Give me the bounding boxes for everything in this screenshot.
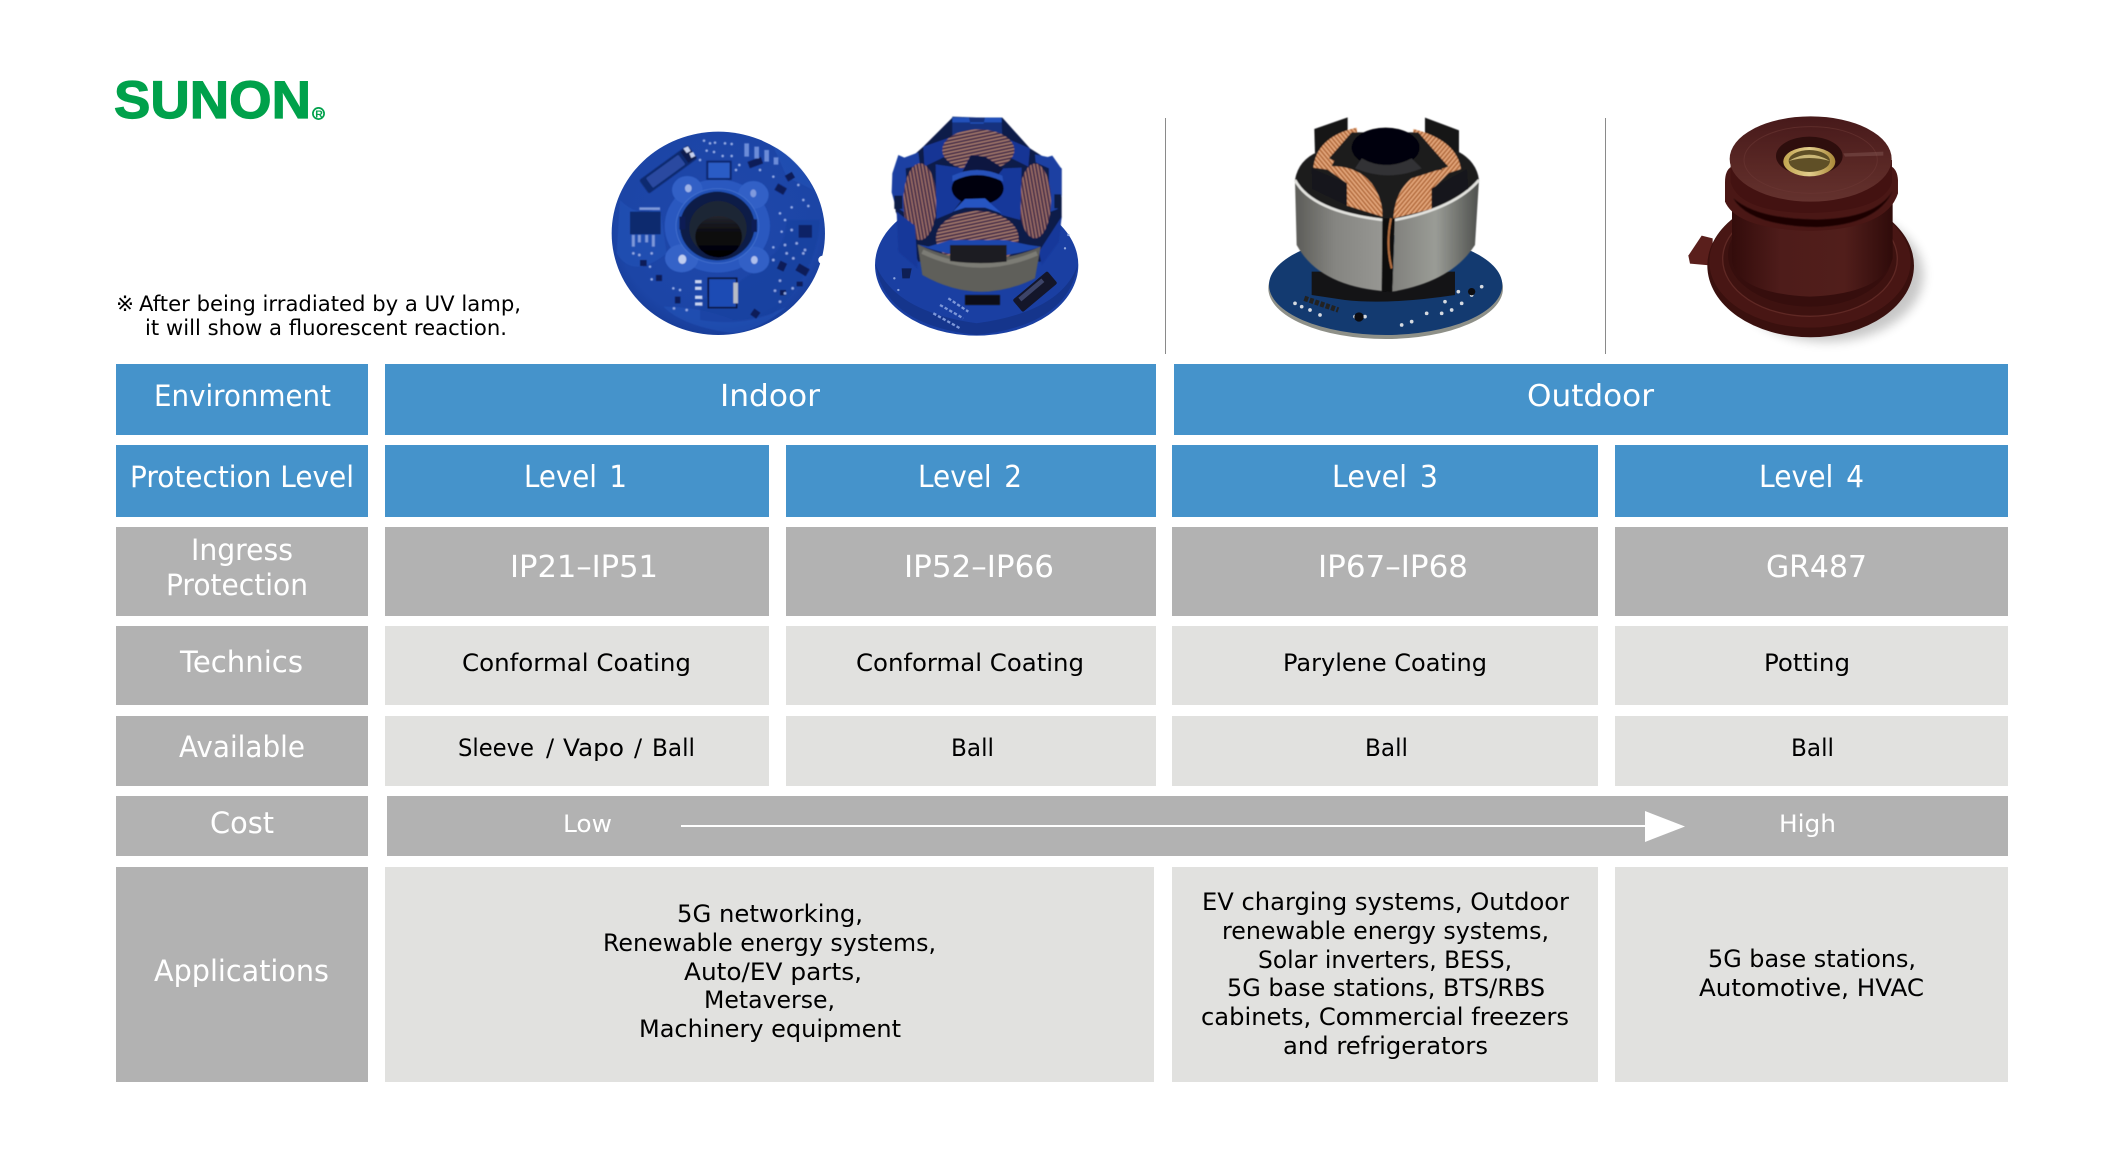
divider line (1165, 118, 1166, 354)
Ball level 4: Ball (1791, 734, 1834, 762)
row label: Environment (116, 364, 368, 435)
right coil (1019, 164, 1051, 238)
Ball level 2 (786, 716, 1156, 786)
lower left and right housing (897, 212, 918, 268)
Conformal Coating level 2 (786, 626, 1156, 705)
outdoor level 3 applications: cabinets, Commercial freezers (1201, 1003, 1569, 1031)
GR487 (1615, 527, 2008, 616)
Ball level 3: Ball (1365, 734, 1408, 762)
body (1732, 198, 1893, 297)
header: Outdoor: Outdoor (1527, 379, 1655, 414)
back tabs (1314, 117, 1348, 153)
note: UV lamp fluorescent reaction: After being irradiated by a UV lamp, (139, 292, 521, 317)
logo: SUNON: SUNON (114, 71, 311, 130)
indoor applications: 5G networking, (677, 900, 863, 928)
row: available (116, 716, 2008, 786)
top cylinder (1731, 160, 1892, 213)
Conformal Coating level 2: Conformal Coating (856, 649, 1084, 677)
flange (1707, 194, 1914, 337)
outdoor level 3 applications: renewable energy systems, (1222, 917, 1549, 945)
front tabs (1312, 168, 1347, 206)
outdoor level 3 applications (1172, 867, 1598, 1082)
arrow: low to high (681, 811, 1685, 842)
slot (1382, 218, 1395, 292)
back coils (1313, 128, 1358, 170)
Sleeve / Vapo / Ball: Vapo (563, 734, 624, 762)
Parylene Coating: Parylene Coating (1283, 649, 1487, 677)
indoor applications (385, 867, 1154, 1082)
row: ingress protection (116, 527, 2008, 616)
IP21-IP51 (385, 527, 769, 616)
row label: Ingress Protection: Ingress (191, 533, 293, 567)
header: Outdoor (1174, 364, 2008, 435)
PCB base (1268, 235, 1503, 339)
row label: Protection Level (116, 445, 368, 517)
left coil (903, 163, 937, 240)
Level 4: Level 4 (1759, 460, 1864, 495)
row label: Technics: Technics (179, 645, 303, 679)
row label: Ingress Protection: Protection (166, 568, 308, 602)
row label: Available (116, 716, 368, 786)
magnet (918, 244, 1041, 292)
header: Indoor: Indoor (720, 379, 821, 414)
indoor applications: Auto/EV parts, (684, 958, 862, 986)
row: protection level (116, 445, 2008, 517)
row label: Available: Available (179, 730, 305, 764)
cost scale bar: Low (563, 810, 612, 838)
note: UV lamp fluorescent reaction: it will show a fluorescent reaction. (145, 316, 507, 341)
row label: Applications: Applications (154, 954, 329, 988)
image: blue-coated motor stator (level 2) (875, 117, 1078, 336)
Sleeve / Vapo / Ball: / (634, 734, 643, 762)
row: environment (116, 364, 2008, 435)
Sleeve / Vapo / Ball (385, 716, 769, 786)
Ball level 3 (1172, 716, 1598, 786)
right outer tabs (1035, 154, 1062, 212)
Level 1: Level 1 (524, 460, 627, 495)
indoor applications: Machinery equipment (639, 1015, 901, 1043)
Potting: Potting (1764, 649, 1850, 677)
row: cost (116, 796, 2008, 856)
left outer tabs (892, 152, 920, 215)
Level 3: Level 3 (1332, 460, 1438, 495)
note: UV lamp fluorescent reaction: ※ (116, 292, 134, 317)
collar (1725, 167, 1898, 231)
capacitor (1012, 271, 1057, 312)
outdoor level 3 applications: and refrigerators (1283, 1032, 1488, 1060)
IP21-IP51: IP21–IP51 (510, 550, 658, 585)
indoor applications: Metaverse, (704, 986, 835, 1014)
top tab (952, 117, 1002, 140)
row label: Protection Level: Protection Level (130, 460, 354, 494)
hub (1329, 132, 1448, 217)
IP52-IP66 (786, 527, 1156, 616)
locating tab (1688, 236, 1713, 266)
IP67-IP68: IP67–IP68 (1318, 550, 1468, 585)
silver stator left (1295, 180, 1383, 291)
row label: Applications (116, 867, 368, 1082)
top coil (942, 129, 1014, 171)
Parylene Coating (1172, 626, 1598, 705)
Ball level 2: Ball (951, 734, 994, 762)
Sleeve / Vapo / Ball: Sleeve (458, 734, 534, 762)
row label: Environment: Environment (154, 379, 331, 413)
rear housing (923, 137, 1030, 167)
bottom coil (936, 211, 1019, 266)
Level 1 (385, 445, 769, 517)
outdoor level 4 applications: Automotive, HVAC (1699, 974, 1924, 1002)
silver stator right (1392, 180, 1479, 292)
outdoor level 4 applications: 5G base stations, (1708, 945, 1916, 973)
IP67-IP68 (1172, 527, 1598, 616)
Potting (1615, 626, 2008, 705)
Sleeve / Vapo / Ball: Ball (652, 734, 695, 762)
divider line (1605, 118, 1606, 354)
cost scale bar: High (1779, 810, 1836, 838)
IP52-IP66: IP52–IP66 (904, 550, 1054, 585)
image: blue-coated PCB under UV light (level 1) (612, 132, 828, 335)
cost scale bar (387, 796, 2008, 856)
row: applications (116, 867, 2008, 1082)
Level 3 (1172, 445, 1598, 517)
Level 2 (786, 445, 1156, 517)
Conformal Coating level 1 (385, 626, 769, 705)
central hub (936, 155, 1022, 220)
outdoor level 4 applications (1615, 867, 2008, 1082)
outdoor level 3 applications: Solar inverters, BESS, (1258, 946, 1512, 974)
hole (679, 192, 757, 260)
row label: Technics (116, 626, 368, 705)
row label: Cost: Cost (210, 806, 274, 840)
Level 2: Level 2 (918, 460, 1022, 495)
dark backing of the stator (893, 118, 1062, 262)
image: parylene-coated motor stator (level 3) (1268, 117, 1503, 339)
Sleeve / Vapo / Ball: / (546, 734, 555, 762)
outdoor level 3 applications: EV charging systems, Outdoor (1202, 888, 1569, 916)
top face (1730, 116, 1892, 202)
crystal component (639, 145, 697, 194)
header: Indoor (385, 364, 1156, 435)
indoor applications: Renewable energy systems, (603, 929, 936, 957)
row: technics (116, 626, 2008, 705)
front coils (1323, 166, 1382, 217)
outdoor level 3 applications: 5G base stations, BTS/RBS (1227, 974, 1545, 1002)
Level 4 (1615, 445, 2008, 517)
inner dark top (1295, 152, 1479, 220)
Ball level 4 (1615, 716, 2008, 786)
GR487: GR487 (1766, 550, 1867, 585)
Conformal Coating level 1: Conformal Coating (462, 649, 691, 677)
row label: Ingress Protection (116, 527, 368, 616)
bore with brass insert (1776, 137, 1843, 176)
image: potted motor (level 4) (1688, 116, 1923, 342)
row label: Cost (116, 796, 368, 856)
note: UV lamp fluorescent reaction (116, 292, 521, 341)
logo: SUNON: R (315, 108, 323, 120)
